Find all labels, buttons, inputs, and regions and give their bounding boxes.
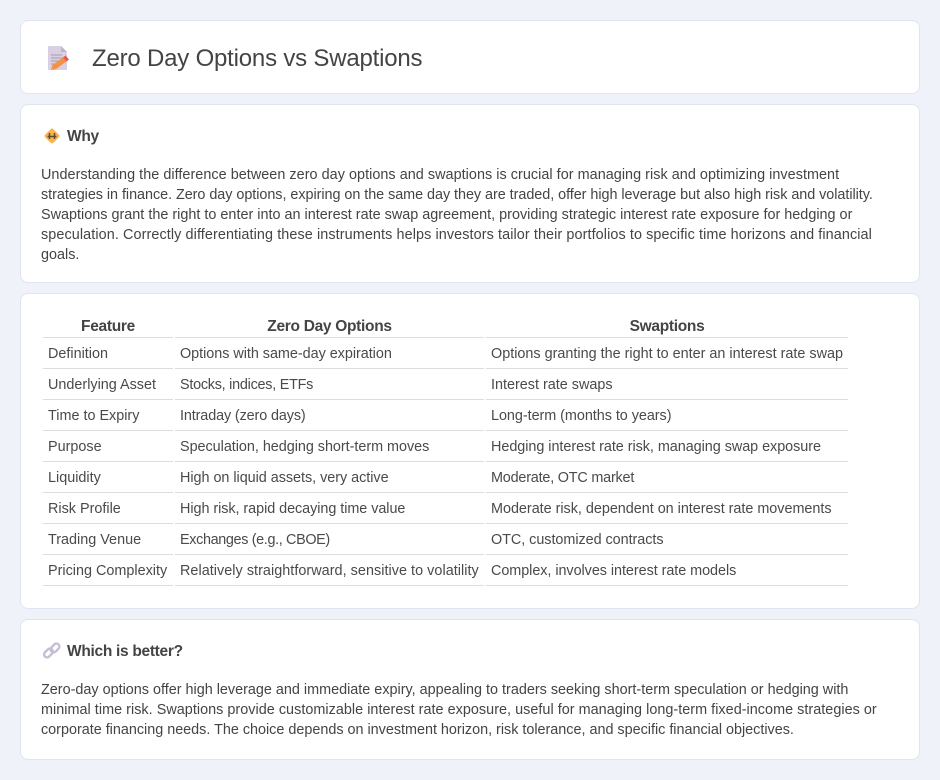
row: purpose (43, 431, 173, 462)
row: purpose: Purpose (48, 439, 102, 455)
icon: document with pencil (48, 46, 69, 70)
row: time to expiry (43, 400, 173, 431)
row: time to expiry: Time to Expiry (48, 408, 139, 424)
row: risk profile: Risk Profile (48, 501, 121, 517)
header: swaptions: Swaptions (630, 318, 704, 335)
text: OTC, customized contracts (491, 532, 664, 548)
text: Stocks, indices, ETFs (180, 377, 313, 393)
text block: which is better: Zero-day options offer high leverage and immediate expiry, appealing to traders seeking short-term speculation or hedging with (41, 682, 848, 698)
row: underlying asset: Underlying Asset (48, 377, 156, 393)
text: Hedging interest rate risk, managing swap exposure (491, 439, 821, 455)
comparison table (43, 317, 848, 586)
panel: header (20, 20, 920, 94)
heading: which is better: Which is better? (67, 643, 183, 660)
text block: why: Understanding the difference between zero day options and swaptions is crucial for managing risk and optimizing investment (41, 167, 839, 183)
text: High on liquid assets, very active (180, 470, 389, 486)
text: Relatively straightforward, sensitive to volatility (180, 563, 479, 579)
header: feature: Feature (81, 318, 135, 335)
row: risk profile (43, 493, 173, 524)
text block: why: Swaptions grant the right to enter into an interest rate swap agreement, providing strategic interest rate exposure for hedging or (41, 207, 852, 223)
header: feature (43, 317, 173, 338)
text block: why: speculation. Correctly differentiating these instruments helps investors tailor their portfolios to specific time horizons and financial (41, 227, 872, 243)
text: Exchanges (e.g., CBOE) (180, 532, 330, 548)
text: Intraday (zero days) (180, 408, 306, 424)
icon: link (43, 642, 61, 659)
text: Moderate risk, dependent on interest rate movements (491, 501, 832, 517)
text block: why: strategies in finance. Zero day options, expiring on the same day they are traded, offer high leverage but also high risk and volatility. (41, 187, 873, 203)
text: Speculation, hedging short-term moves (180, 439, 429, 455)
heading: why: Why (67, 128, 99, 145)
text block: why (41, 167, 873, 263)
row: trading venue: Trading Venue (48, 532, 141, 548)
text: Moderate, OTC market (491, 470, 634, 486)
row: definition: Definition (48, 346, 108, 362)
header: zero day options: Zero Day Options (267, 318, 392, 335)
title: Zero Day Options vs Swaptions (92, 45, 422, 72)
row: definition (43, 338, 173, 369)
text: High risk, rapid decaying time value (180, 501, 405, 517)
row: liquidity (43, 462, 173, 493)
text: Interest rate swaps (491, 377, 613, 393)
text: Options granting the right to enter an interest rate swap (491, 346, 843, 362)
header: swaptions (486, 317, 848, 338)
row: pricing complexity: Pricing Complexity (48, 563, 167, 579)
text block: which is better: corporate financing needs. The choice depends on investment horizon, risk tolerance, and specific financial objectives. (41, 722, 794, 738)
row: pricing complexity (43, 555, 173, 586)
panel: comparison table (20, 293, 920, 609)
row: liquidity: Liquidity (48, 470, 101, 486)
row: trading venue (43, 524, 173, 555)
text: Long-term (months to years) (491, 408, 671, 424)
icon: warning diamond (44, 128, 60, 144)
row: underlying asset (43, 369, 173, 400)
panel: which is better (20, 619, 920, 760)
text block: which is better: minimal time risk. Swaptions provide customizable interest rate exposure, useful for managing long-term fixed-income strategies or (41, 702, 877, 718)
panel: why (20, 104, 920, 283)
text block: why: goals. (41, 247, 79, 263)
header: zero day options (175, 317, 484, 338)
text: Options with same-day expiration (180, 346, 392, 362)
text block: which is better (41, 682, 877, 738)
text: Complex, involves interest rate models (491, 563, 736, 579)
